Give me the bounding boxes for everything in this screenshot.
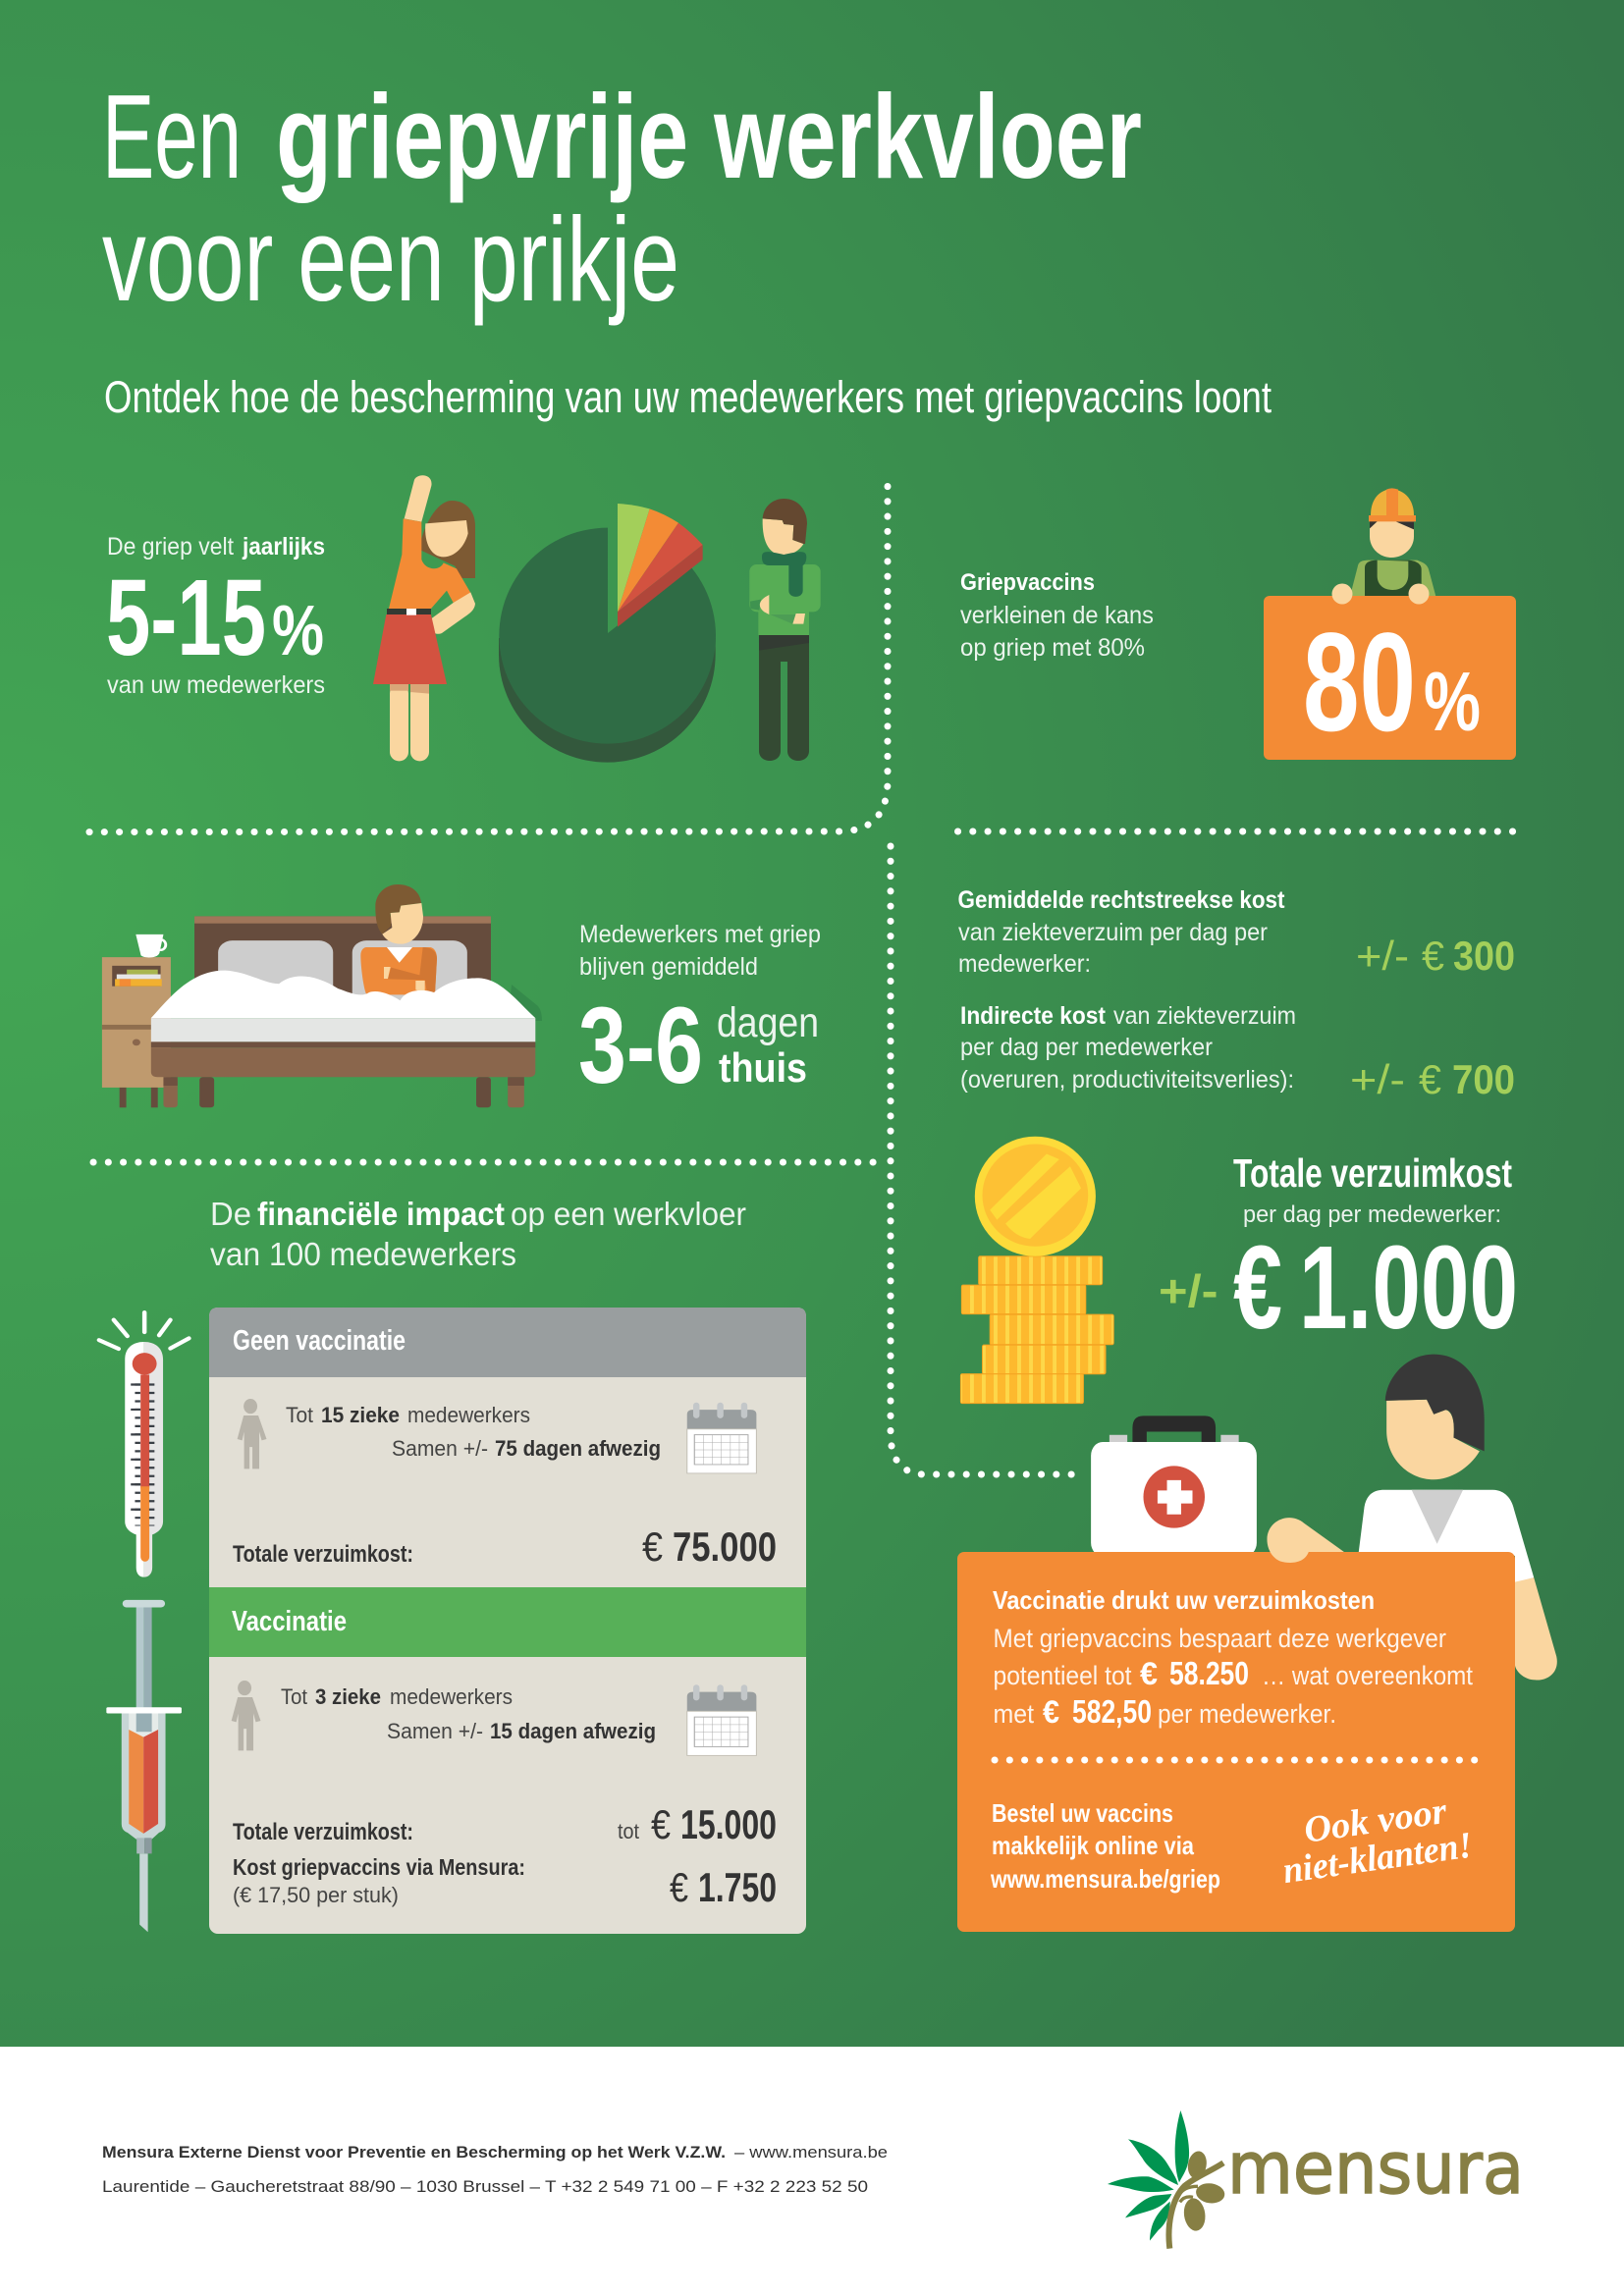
- row: no vaccination details: Totale verzuimkost:: [233, 1541, 413, 1568]
- row: vaccination details: [232, 1681, 777, 1910]
- row: no vaccination details: 75 dagen afwezig: [495, 1436, 661, 1461]
- text: de griep velt jaarlijks: jaarlijks: [242, 533, 325, 561]
- header: vaccinatie: Vaccinatie: [232, 1606, 347, 1637]
- text: totale verzuimkost: Totale verzuimkost: [1233, 1150, 1512, 1196]
- header: geen vaccinatie: Geen vaccinatie: [233, 1325, 406, 1357]
- text: savings: … wat overeenkomt: [1262, 1661, 1473, 1690]
- text: totale verzuimkost: [1159, 1150, 1518, 1354]
- row: vaccination details: €: [670, 1864, 688, 1910]
- footer text: Laurentide – Gaucheretstraat 88/90 – 1030 Brussel – T +32 2 549 71 00 – F +32 2 223 52 50: [102, 2177, 868, 2196]
- value: 300 euro: +/-: [1356, 933, 1409, 979]
- value: 700 euro: €: [1419, 1056, 1441, 1102]
- icon: woman in bed: [102, 884, 542, 1107]
- row: no vaccination details: medewerkers: [407, 1403, 530, 1427]
- sign: 80%: [1264, 583, 1516, 761]
- panel: direct and indirect cost: van ziekteverzuim: [1113, 1002, 1296, 1030]
- text: savings: 582,50: [1072, 1693, 1152, 1730]
- value: 700 euro: 700: [1452, 1056, 1515, 1102]
- icon: sick people and pie chart: [373, 475, 821, 763]
- value: 300 euro: 300: [1453, 933, 1515, 979]
- text: de griep velt jaarlijks: van uw medewerkers: [107, 671, 325, 699]
- sign: 80%: 80: [1303, 605, 1416, 761]
- text: griepvaccins: Griepvaccins: [960, 569, 1095, 596]
- subtitle: Ontdek hoe de bescherming van uw medewerkers met griepvaccins loont: [104, 372, 1272, 422]
- footer text: Mensura Externe Dienst voor Preventie en Bescherming op het Werk V.Z.W.: [102, 2143, 726, 2162]
- panel: direct and indirect cost: per dag per medewerker: [960, 1034, 1213, 1061]
- icon: doctor hand: [1267, 1518, 1344, 1563]
- text: de griep velt jaarlijks: %: [272, 592, 324, 670]
- text: savings: €: [1043, 1694, 1059, 1730]
- text: order online: www.mensura.be/griep: [990, 1864, 1220, 1894]
- row: no vaccination details: 15 zieke: [321, 1403, 400, 1427]
- title: Een: [102, 70, 242, 203]
- icon: syringe: [106, 1600, 182, 1932]
- row: vaccination details: tot: [618, 1819, 639, 1843]
- heading: financial impact: op een werkvloer: [511, 1196, 746, 1232]
- header: vaccinatie: [209, 1587, 806, 1657]
- text: totale verzuimkost: +/-: [1159, 1265, 1218, 1316]
- text: savings: Met griepvaccins bespaart deze werkgever: [994, 1624, 1446, 1653]
- text: griepvaccins: op griep met 80%: [960, 634, 1145, 662]
- icon: first aid kit: [1091, 1415, 1257, 1556]
- row: vaccination details: medewerkers: [390, 1684, 513, 1709]
- divider: [995, 1757, 1479, 1763]
- row: vaccination details: 3 zieke: [315, 1684, 381, 1709]
- header: geen vaccinatie: [209, 1308, 806, 1377]
- row: no vaccination details: €: [642, 1523, 663, 1570]
- row: no vaccination details: 75.000: [673, 1523, 777, 1570]
- text: savings: per medewerker.: [1158, 1699, 1336, 1729]
- icon: person: [238, 1399, 266, 1468]
- title: griepvrije werkvloer: [276, 70, 1142, 203]
- panel: direct and indirect cost: [958, 886, 1515, 1102]
- text: de griep velt jaarlijks: De griep velt: [107, 533, 234, 561]
- text: script callout: Ook voor: [1301, 1790, 1450, 1851]
- text: 3-6 dagen thuis: Medewerkers met griep: [579, 921, 821, 948]
- value: 300 euro: [1356, 933, 1515, 979]
- row: no vaccination details: [233, 1399, 777, 1570]
- panel: savings card with doctor: [957, 1355, 1557, 1932]
- value: 700 euro: [1350, 1056, 1515, 1102]
- text: totale verzuimkost: per dag per medewerker:: [1243, 1201, 1501, 1228]
- text: order online: [990, 1798, 1220, 1894]
- value: 700 euro: +/-: [1350, 1056, 1405, 1102]
- text: savings: €: [1140, 1656, 1158, 1691]
- panel: total cost: [960, 1137, 1518, 1404]
- icon: doctor: [1358, 1355, 1557, 1681]
- dotted dividers: [89, 481, 1514, 1474]
- text: 3-6 dagen thuis: dagen: [717, 999, 819, 1046]
- heading: financial impact: [210, 1196, 746, 1272]
- row: vaccination details: (€ 17,50 per stuk): [233, 1883, 399, 1907]
- text: savings: met: [994, 1699, 1034, 1729]
- panel: direct and indirect cost: (overuren, productiviteitsverlies):: [960, 1066, 1294, 1094]
- text: 3-6 dagen thuis: [578, 921, 821, 1106]
- sign: 80%: %: [1424, 656, 1481, 749]
- text: totale verzuimkost: €: [1233, 1220, 1282, 1354]
- icon: man with scarf: [749, 499, 821, 761]
- footer band: [0, 2047, 1624, 2296]
- panel: staying home: [102, 884, 821, 1107]
- text: savings: Vaccinatie drukt uw verzuimkosten: [993, 1585, 1375, 1615]
- text: 3-6 dagen thuis: blijven gemiddeld: [579, 953, 758, 981]
- panel: direct and indirect cost: Indirecte kost: [960, 1002, 1107, 1030]
- text: savings: 58.250: [1169, 1655, 1249, 1691]
- text: savings: [993, 1585, 1473, 1730]
- icon: olive branch: [1108, 2110, 1226, 2249]
- row: vaccination details: 15 dagen afwezig: [490, 1719, 656, 1743]
- title: [102, 70, 1142, 326]
- row: vaccination details: Totale verzuimkost:: [233, 1819, 413, 1845]
- panel: vaccine reduces risk: [960, 488, 1516, 761]
- icon: calendar: [687, 1406, 756, 1473]
- panel: direct and indirect cost: medewerker:: [958, 950, 1091, 978]
- row: vaccination details: Kost griepvaccins via Mensura:: [233, 1854, 525, 1880]
- heading: financial impact: De: [210, 1196, 251, 1232]
- icon: sick woman: [360, 884, 437, 1001]
- pie chart: [499, 504, 716, 763]
- footer text: – www.mensura.be: [734, 2143, 888, 2162]
- title: voor een prikje: [102, 192, 679, 326]
- text: griepvaccins: verkleinen de kans: [960, 602, 1154, 629]
- heading: financial impact: van 100 medewerkers: [210, 1236, 516, 1272]
- icon: nightstand: [102, 934, 171, 1107]
- icon: thermometer and syringe: [99, 1312, 189, 1932]
- icon: calendar: [687, 1687, 756, 1755]
- icon: woman stretching: [373, 475, 475, 761]
- icon: blanket and bed frame: [151, 971, 542, 1107]
- card: orange savings: [957, 1552, 1515, 1932]
- icon: thermometer: [99, 1312, 189, 1577]
- panel: comparison table: [209, 1308, 806, 1934]
- row: vaccination details: 15.000: [680, 1801, 777, 1847]
- text: griepvaccins: [960, 569, 1154, 662]
- text: 3-6 dagen thuis: 3-6: [578, 986, 703, 1106]
- text: order online: Bestel uw vaccins: [992, 1798, 1173, 1828]
- row: vaccination details: 1.750: [698, 1864, 777, 1910]
- text: de griep velt jaarlijks: 5-15: [106, 558, 266, 678]
- heading: financial impact: financiële impact: [257, 1196, 505, 1232]
- panel: direct and indirect cost: Gemiddelde rechtstreekse kost: [958, 886, 1285, 914]
- logo: mensura: mensura: [1227, 2127, 1524, 2211]
- text: script callout: niet-klanten!: [1280, 1825, 1475, 1892]
- footer text: [102, 2143, 888, 2196]
- icon: doctor and first-aid kit: [1091, 1355, 1557, 1681]
- row: no vaccination details: Samen +/-: [392, 1436, 488, 1461]
- icon: person: [232, 1681, 260, 1750]
- icon: headboard and pillows: [194, 916, 491, 1016]
- row: vaccination details: Tot: [281, 1684, 307, 1709]
- table background: [209, 1308, 806, 1934]
- value: 300 euro: €: [1422, 933, 1444, 979]
- text: order online: makkelijk online via: [992, 1831, 1194, 1860]
- icon: gold coins: [960, 1137, 1113, 1404]
- row: vaccination details: Samen +/-: [387, 1719, 483, 1743]
- icon: construction worker: [1350, 488, 1435, 596]
- text: totale verzuimkost: 1.000: [1299, 1220, 1518, 1354]
- text: 3-6 dagen thuis: thuis: [719, 1044, 807, 1091]
- row: no vaccination details: Tot: [286, 1403, 313, 1427]
- text: savings: potentieel tot: [994, 1661, 1132, 1690]
- panel: flu statistic: [106, 475, 821, 763]
- text: script callout: [1280, 1790, 1475, 1892]
- row: vaccination details: €: [651, 1801, 671, 1847]
- panel: direct and indirect cost: van ziekteverzuim per dag per: [958, 919, 1268, 946]
- logo: mensura: [1108, 2110, 1524, 2249]
